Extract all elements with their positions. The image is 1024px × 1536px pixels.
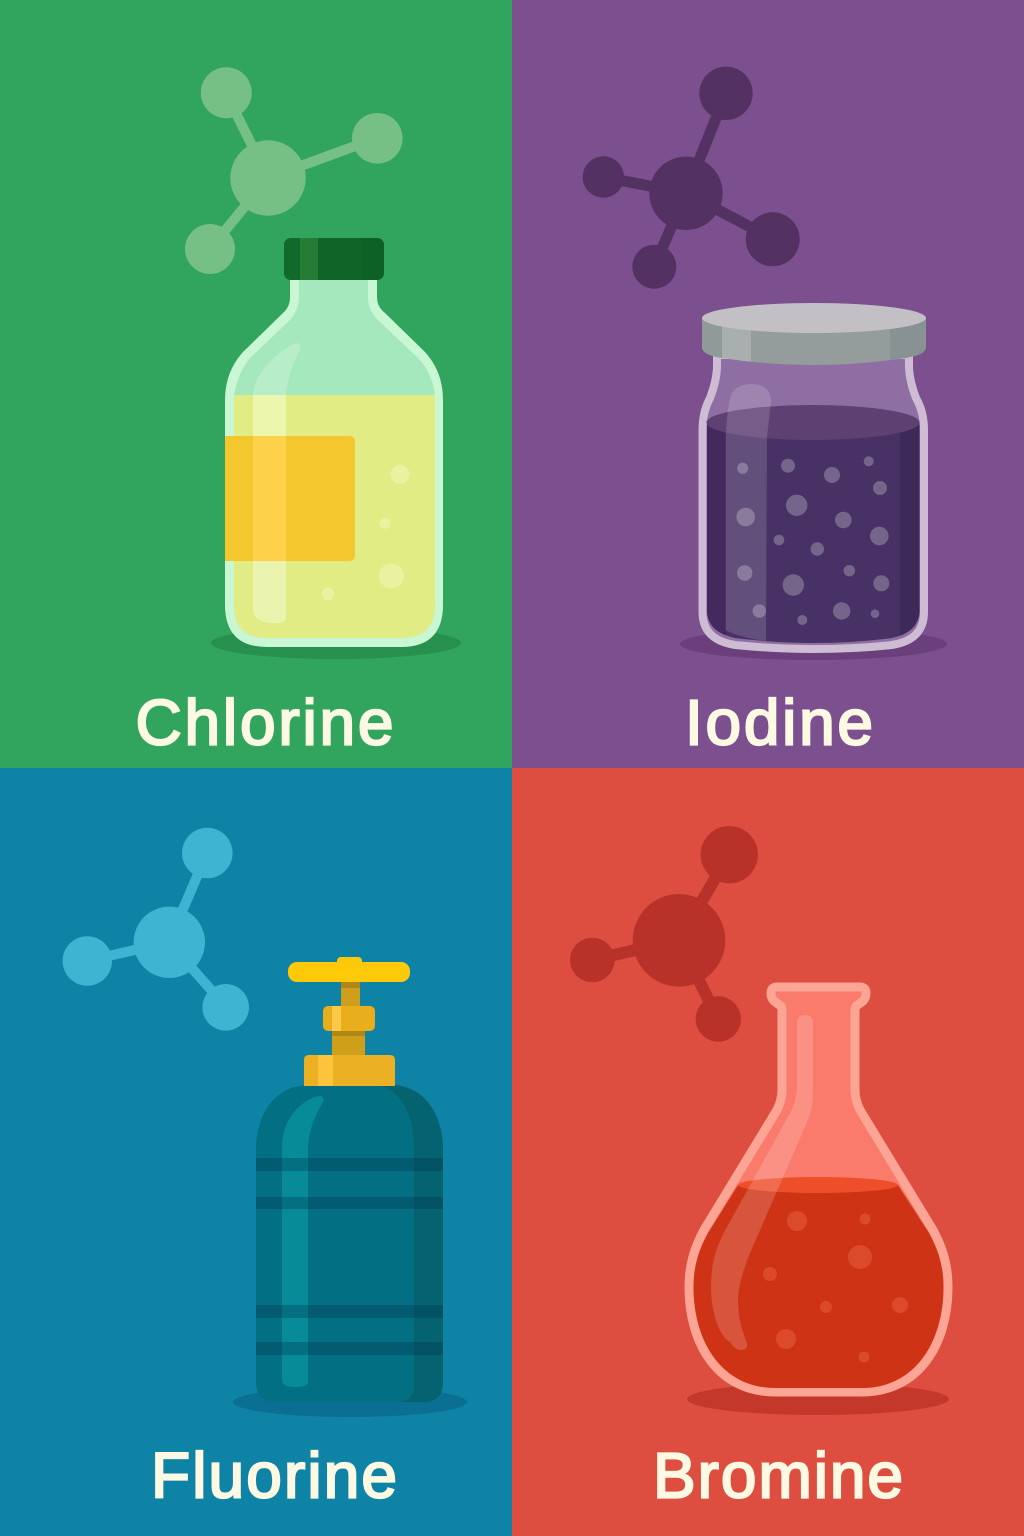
- icon: bromine flask: [687, 987, 949, 1415]
- label: Bromine: Bromine: [653, 1440, 903, 1512]
- panel: chlorine: [0, 0, 512, 768]
- label: Iodine: Iodine: [685, 686, 873, 758]
- label: Fluorine: Fluorine: [151, 1440, 397, 1512]
- icon: iodine molecule: [583, 67, 800, 289]
- icon: fluorine gas cylinder: [233, 957, 467, 1417]
- panel: fluorine: [0, 768, 512, 1536]
- panel: bromine: [512, 768, 1024, 1536]
- icon: chlorine bottle: [211, 238, 461, 659]
- label: Chlorine: Chlorine: [136, 686, 394, 758]
- icon: chlorine molecule: [185, 67, 403, 274]
- panel: iodine: [512, 0, 1024, 768]
- icon: iodine jar: [680, 303, 947, 660]
- icon: fluorine molecule: [63, 828, 249, 1031]
- icon: bromine molecule: [570, 826, 758, 1042]
